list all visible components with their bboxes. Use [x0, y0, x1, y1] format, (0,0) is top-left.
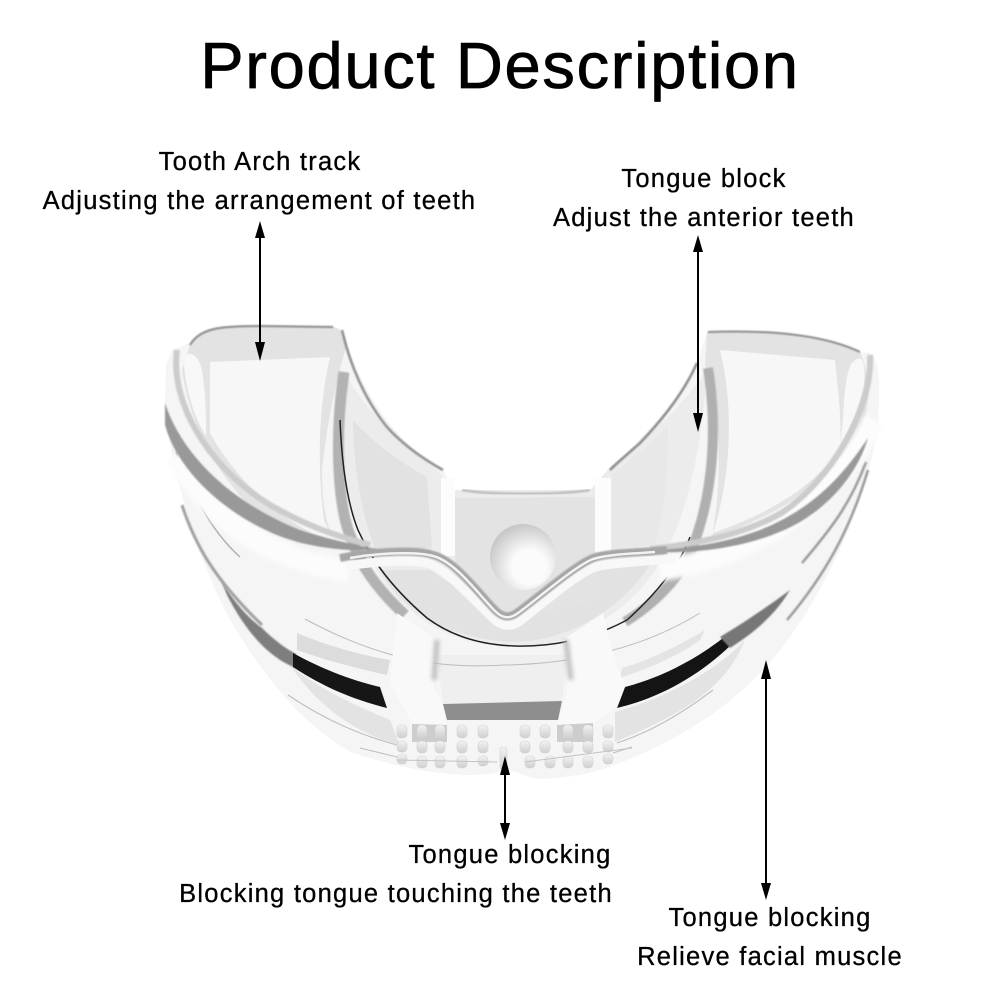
left well highlight [210, 357, 334, 541]
left oval highlight [184, 354, 206, 436]
left wire tube [176, 350, 370, 545]
left outer edge shading [182, 505, 262, 625]
lower thin lines [288, 690, 713, 757]
arrow: tooth arch track [255, 221, 265, 361]
arrow: tongue block [693, 235, 703, 432]
bump grey backing [412, 723, 593, 742]
post shading [434, 640, 571, 680]
left inner rim dark line [340, 420, 515, 646]
right side edge shading [787, 462, 868, 620]
centre plate between posts [437, 655, 567, 704]
right cup panel [612, 425, 668, 548]
wire white sleeve [176, 420, 875, 572]
label: tongue block: Adjust the anterior teeth [553, 204, 855, 232]
arrow: tongue blocking centre [500, 756, 510, 840]
stripe above black band left [297, 633, 390, 675]
plate top edge [462, 490, 590, 494]
outer body silhouette [165, 325, 879, 779]
bump rows on tongue guard [397, 725, 613, 770]
label: tongue blocking right: Tongue blocking [668, 904, 872, 932]
right wing [705, 331, 868, 538]
thin arc line [305, 613, 700, 666]
left wing [182, 326, 347, 545]
right wire dark taper [640, 438, 868, 552]
left side thin line [176, 452, 240, 557]
lower grey band right [615, 640, 745, 742]
black band left [293, 653, 387, 708]
centre wire white shadow [345, 558, 675, 625]
label: tooth arch track: Adjusting the arrangement of teeth [43, 187, 476, 215]
tongue block plate [455, 497, 595, 622]
right inner rim dark line [515, 537, 690, 646]
lower grey band left [290, 665, 400, 745]
label: tongue blocking right [637, 904, 903, 971]
white post strip right [595, 478, 611, 552]
dark band left [220, 578, 296, 668]
left inner rim shading [338, 372, 405, 615]
label: tongue blocking centre: Blocking tongue touching the teeth [179, 880, 613, 908]
label: tooth arch track: Tooth Arch track [159, 148, 361, 176]
left white post [390, 613, 447, 725]
centre grey strip [443, 701, 562, 720]
centre wire highlight [350, 552, 655, 617]
centre wire [340, 550, 667, 616]
centre cup [341, 370, 707, 647]
right oval highlight [840, 359, 864, 445]
label: tongue blocking centre [179, 841, 613, 908]
wing top edges [190, 326, 860, 352]
arrow: tongue blocking right [761, 660, 771, 900]
upper outer rim right [610, 363, 697, 470]
label: tooth arch track [43, 148, 476, 215]
label: tongue blocking right: Relieve facial muscle [637, 943, 903, 971]
bump connecting lines [397, 748, 632, 762]
dimple [490, 524, 556, 590]
orthodontic trainer illustration [165, 325, 879, 779]
left cup panel [353, 420, 432, 548]
grey strip left post edge [434, 490, 438, 554]
label: tongue block: Tongue block [621, 165, 787, 193]
right well highlight [713, 350, 841, 533]
black band right [617, 638, 731, 708]
left wire dark taper [165, 403, 382, 550]
upper outer rim left [342, 330, 443, 470]
title: Product Description [200, 29, 800, 102]
label: tongue blocking centre: Tongue blocking [408, 841, 612, 869]
lower cup [380, 565, 650, 642]
right white post [557, 613, 625, 725]
label: tongue block [553, 165, 855, 232]
dark band right [720, 590, 790, 648]
white post strip left [441, 478, 455, 556]
right wire tube [650, 355, 870, 549]
right inner rim shading [625, 368, 713, 622]
stripe above black band right [620, 630, 705, 678]
